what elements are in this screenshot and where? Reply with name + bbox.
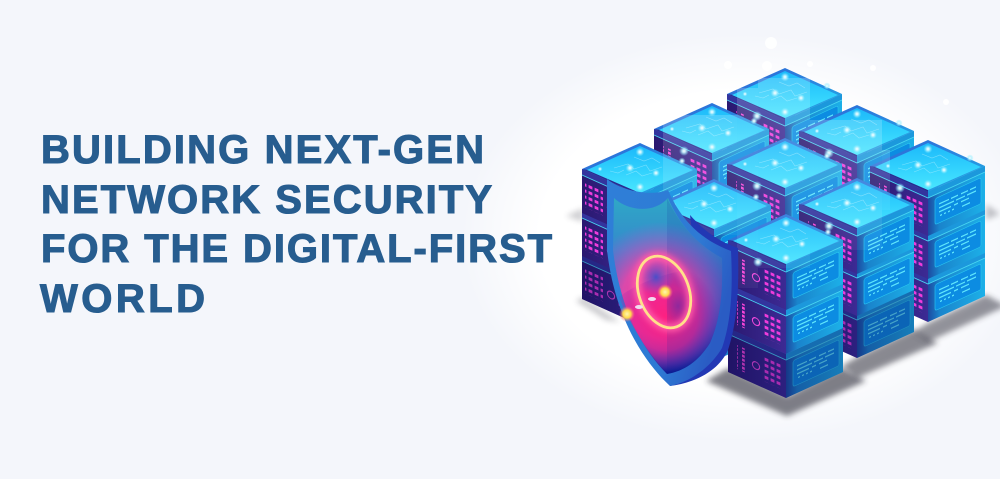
title: [40, 128, 552, 321]
floating light particles: [724, 37, 949, 105]
title: BUILDING NEXT-GEN: [41, 128, 484, 172]
ring shade: [665, 289, 691, 323]
glowing ring: [628, 249, 700, 335]
server stack: front: [728, 214, 843, 398]
shield dark edge: [664, 215, 738, 386]
server stack: back left: [654, 103, 769, 285]
server stack: middle: [727, 138, 842, 320]
server stack: back right: [799, 105, 914, 287]
shield lower section: [619, 266, 721, 374]
icon: security shield: [607, 179, 738, 386]
connector dots: [619, 297, 656, 322]
translucent light beams: [663, 78, 890, 288]
server stack: centre left: [656, 179, 771, 361]
shield face: [613, 198, 722, 374]
server stack: far right: [870, 140, 985, 322]
ring centre: [638, 258, 674, 296]
server stack: left: [582, 143, 697, 325]
pink glow: [613, 198, 722, 374]
shield rim: [607, 179, 732, 386]
title: WORLD: [40, 277, 205, 321]
server stack: right middle: [799, 178, 914, 358]
white glow behind servers: [460, 33, 1000, 443]
ground shadows: [566, 204, 1000, 416]
centre light: [657, 284, 673, 300]
shield right half tint: [667, 198, 722, 374]
title: FOR THE DIGITAL-FIRST: [41, 227, 552, 271]
server stack: back top: [727, 68, 842, 250]
title: NETWORK SECURITY: [41, 178, 492, 222]
